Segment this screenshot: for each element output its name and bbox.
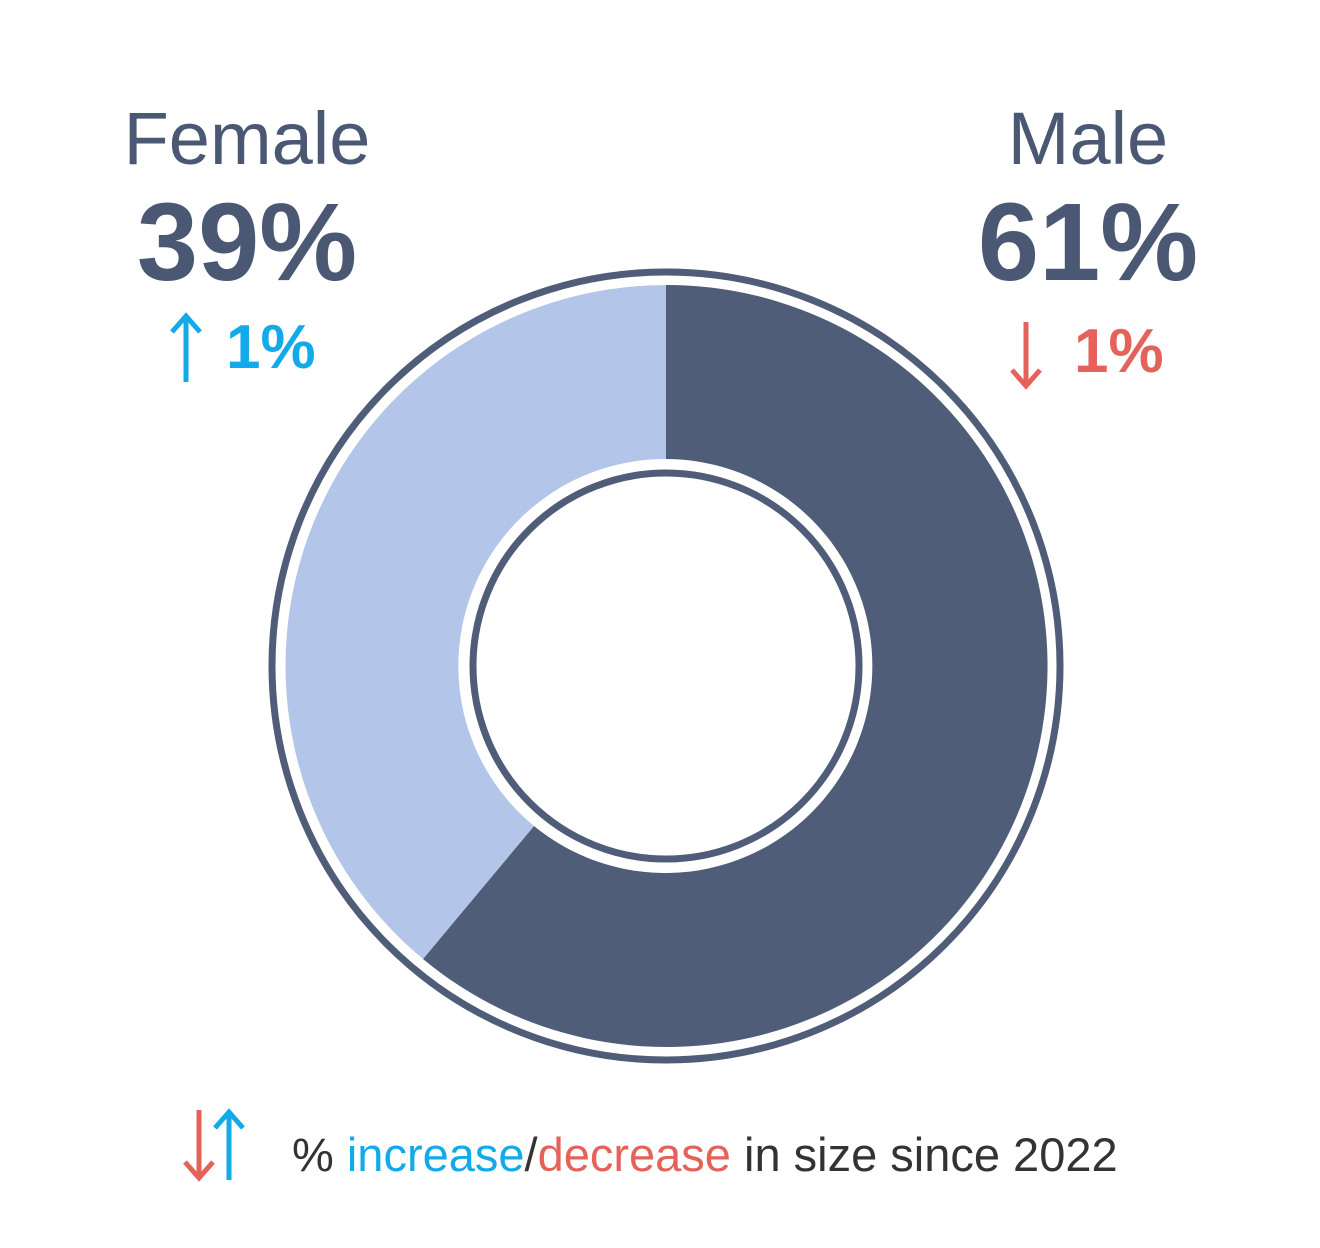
female change indicator: 1%	[226, 313, 316, 382]
male change indicator: 1%	[1074, 317, 1164, 386]
legend: % increase/decrease in size since 2022	[292, 1128, 1118, 1181]
male change indicator	[1012, 317, 1164, 386]
male label	[978, 97, 1198, 304]
male percentage: 61%	[978, 181, 1198, 304]
icon: down/up arrows	[185, 1110, 213, 1178]
female change indicator	[172, 313, 316, 382]
female label	[124, 97, 370, 304]
female label: Female	[124, 97, 370, 180]
donut chart	[272, 272, 1060, 1060]
female percentage: 39%	[137, 181, 357, 304]
legend	[185, 1110, 1118, 1181]
segment: male 61%	[423, 285, 1048, 1047]
male label: Male	[1008, 97, 1168, 180]
segment: female 39%	[286, 285, 666, 959]
